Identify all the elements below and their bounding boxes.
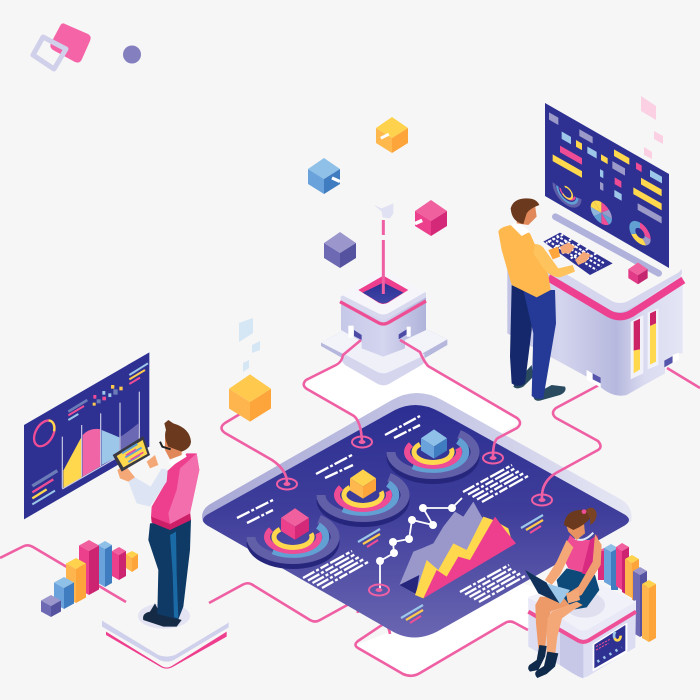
console body bbox=[507, 250, 683, 396]
console rim bbox=[517, 202, 682, 312]
analyst man at console bbox=[498, 198, 591, 401]
pink cube bbox=[281, 508, 309, 540]
mini labels bbox=[596, 639, 610, 650]
collar bbox=[511, 222, 530, 236]
sleeve bbox=[533, 244, 575, 277]
front arm bbox=[545, 540, 573, 585]
front left shade bbox=[560, 623, 583, 678]
area chart mountains bbox=[399, 502, 516, 598]
presenter platform bbox=[102, 583, 229, 669]
hair bbox=[511, 198, 539, 224]
paragraph strip top right bbox=[463, 465, 528, 502]
floating yellow cube bbox=[376, 117, 408, 153]
rear sleeve bbox=[548, 247, 560, 259]
server platform bbox=[321, 203, 447, 385]
opening bbox=[358, 276, 408, 304]
hand bbox=[566, 590, 580, 603]
chart axis lines bbox=[62, 392, 139, 489]
keyboard bbox=[543, 233, 613, 275]
screen panel bbox=[24, 352, 149, 519]
door right bbox=[664, 356, 673, 367]
paragraph strip left bbox=[303, 551, 368, 588]
beam tip bbox=[374, 203, 393, 218]
bar 1 bbox=[41, 595, 61, 617]
beam bbox=[379, 220, 388, 294]
floating purple cube bbox=[324, 232, 356, 268]
hands bbox=[560, 243, 575, 253]
console top bbox=[517, 198, 681, 303]
red cube on console bbox=[628, 262, 648, 284]
board surface bbox=[203, 405, 629, 638]
trousers bbox=[148, 519, 191, 619]
donut chart with pink cube bbox=[251, 508, 335, 564]
connector lines on the board bbox=[222, 340, 700, 499]
top dark side bbox=[582, 535, 599, 576]
skirt bbox=[557, 568, 599, 609]
trouser highlight bbox=[170, 532, 178, 618]
yellow tall bar bbox=[642, 580, 656, 642]
white line chart bbox=[376, 498, 462, 590]
lavender side bbox=[102, 620, 229, 662]
mini screen bbox=[593, 622, 627, 672]
top bbox=[528, 579, 636, 630]
area chart bbox=[63, 437, 82, 488]
pale pink squares above console bbox=[641, 96, 663, 159]
ring gauge bbox=[30, 417, 59, 450]
front shoe bbox=[533, 385, 566, 401]
board rim bbox=[202, 393, 632, 522]
yellow bar bbox=[625, 555, 639, 602]
base tier bbox=[321, 308, 447, 382]
rim bbox=[528, 597, 636, 639]
isometric bar chart bbox=[41, 540, 138, 617]
right door bbox=[399, 329, 407, 339]
left wall screen bbox=[24, 352, 149, 519]
screen stand shadow bbox=[555, 217, 659, 273]
decorative lavender outline square bbox=[33, 37, 66, 69]
bar 4 bbox=[79, 540, 99, 595]
bar labels bbox=[68, 400, 87, 412]
purple bar bbox=[633, 567, 647, 637]
floating pink cube bbox=[415, 200, 447, 236]
yellow series bbox=[415, 517, 511, 598]
blue cube bbox=[421, 429, 447, 459]
pink bar bbox=[598, 548, 610, 580]
white floor area under board bbox=[303, 358, 545, 674]
shoe right bbox=[535, 652, 558, 678]
decorative purple dot bbox=[123, 46, 141, 64]
screen panel bbox=[545, 103, 669, 268]
hair bbox=[564, 510, 590, 530]
woman with laptop bbox=[525, 508, 602, 678]
laptop base bbox=[547, 583, 570, 604]
pale blue squares above big cube bbox=[239, 318, 260, 372]
purple series bbox=[399, 502, 510, 595]
yellow cube bbox=[350, 469, 376, 499]
laptop screen back bbox=[525, 570, 560, 603]
analyst console bbox=[507, 198, 683, 396]
sweater bbox=[498, 225, 551, 297]
vest hem bbox=[151, 512, 191, 530]
shoes bbox=[143, 603, 182, 627]
door left bbox=[587, 370, 601, 387]
left door bbox=[348, 326, 354, 338]
middle tier bbox=[341, 343, 425, 385]
top bbox=[562, 535, 599, 576]
bar 6 bbox=[112, 547, 126, 580]
floating blue cube bbox=[308, 158, 340, 194]
legend stripes centre bbox=[358, 529, 380, 547]
scattered dots bbox=[93, 385, 123, 406]
bar 5 bbox=[98, 541, 112, 587]
pie chart bbox=[591, 196, 612, 230]
arm back bbox=[567, 534, 602, 601]
hair bbox=[164, 420, 191, 452]
pink band bbox=[528, 612, 636, 642]
short text strips on board bbox=[237, 416, 420, 523]
back shoe bbox=[513, 365, 533, 388]
top bbox=[102, 583, 229, 657]
bar 7 bbox=[126, 551, 138, 572]
vest bbox=[151, 453, 199, 524]
main dashboard board bbox=[202, 393, 632, 638]
front leg bbox=[547, 602, 583, 655]
status bars on console bbox=[631, 315, 643, 379]
charts behind woman bbox=[598, 543, 656, 642]
sleeve bbox=[128, 468, 168, 507]
shoe left bbox=[528, 645, 547, 672]
body bbox=[528, 598, 636, 678]
pink underside bbox=[106, 632, 227, 669]
collar bbox=[168, 453, 187, 466]
pink bar 2 bbox=[616, 543, 629, 596]
legend stripes right bbox=[521, 515, 543, 533]
connection nodes bbox=[277, 436, 552, 596]
paragraph strip bottom right bbox=[460, 565, 525, 602]
blue bar bbox=[604, 544, 618, 590]
seat shadow bbox=[565, 592, 605, 618]
face bbox=[567, 523, 585, 540]
ring chart bbox=[632, 221, 648, 245]
donut chart with yellow cube bbox=[321, 469, 405, 522]
face bbox=[165, 437, 182, 459]
dashboard widgets bbox=[549, 112, 662, 258]
pink band bbox=[340, 301, 426, 324]
face bbox=[517, 205, 537, 225]
bar 3 bbox=[66, 558, 86, 603]
hands bbox=[117, 465, 135, 482]
decorative pink square bbox=[50, 23, 91, 63]
man with tablet bbox=[113, 420, 199, 627]
rear leg bbox=[535, 597, 569, 648]
pink series bbox=[423, 517, 516, 598]
pink band bbox=[548, 278, 683, 317]
legend stripes bottom bbox=[401, 605, 423, 623]
seat box bbox=[528, 579, 636, 678]
neckline bbox=[575, 533, 593, 540]
mini donut bbox=[614, 631, 621, 640]
arc gauge bbox=[554, 180, 580, 211]
ponytail bbox=[585, 508, 597, 525]
wall screen with dashboard bbox=[545, 103, 669, 268]
front leg bbox=[523, 290, 556, 399]
back leg bbox=[510, 285, 533, 386]
donut chart with blue cube bbox=[391, 429, 475, 479]
headset bbox=[160, 442, 171, 449]
chart base bbox=[399, 575, 423, 598]
bar 2 bbox=[54, 577, 74, 609]
vest light side bbox=[168, 453, 199, 524]
hair tie bbox=[582, 509, 586, 514]
big yellow cube bbox=[229, 374, 271, 422]
box body bbox=[341, 297, 426, 357]
box top bbox=[341, 273, 426, 320]
connector lines behind the board bbox=[0, 545, 528, 676]
tablet bbox=[113, 436, 150, 472]
foot shadow bbox=[138, 603, 190, 629]
